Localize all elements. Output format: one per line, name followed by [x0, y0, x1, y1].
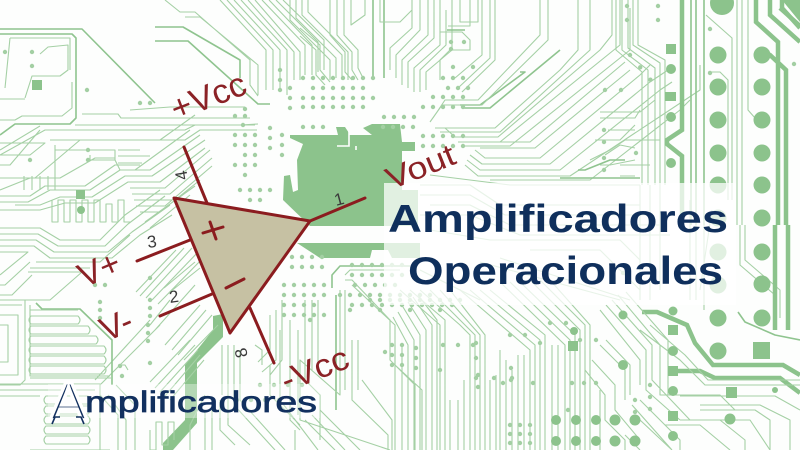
pin number 3: 3 — [146, 232, 158, 252]
title line 2: Operacionales — [408, 250, 723, 293]
logo wordmark: mplificadores — [85, 386, 317, 419]
label: -Vcc: -Vcc — [275, 339, 354, 399]
label: V-: V- — [94, 302, 139, 349]
logo backdrop — [48, 384, 320, 418]
op-amp symbol — [137, 147, 365, 363]
lead: -Vcc pin 8 — [250, 308, 274, 363]
label: Vout: Vout — [381, 137, 461, 196]
traces: behind title — [420, 175, 712, 310]
logo letter A: A — [50, 372, 87, 432]
traces: lower right — [585, 292, 800, 450]
copper pour: lower left strip — [163, 314, 223, 450]
traces: top left — [0, 29, 258, 190]
label: +Vcc: +Vcc — [165, 65, 252, 128]
title line 1: Amplificadores — [388, 198, 728, 241]
plus sign — [203, 222, 223, 239]
pin number 2: 2 — [168, 287, 180, 307]
lead: +Vcc pin 4 — [184, 147, 207, 203]
title — [388, 198, 728, 293]
logo feet — [52, 417, 84, 424]
copper pour: lower band — [297, 243, 420, 258]
traces: lower left comb — [0, 303, 318, 450]
title backdrop — [384, 183, 736, 305]
traces: left middle — [0, 115, 218, 385]
pour slit — [337, 131, 356, 150]
lead: V- pin 2 — [160, 294, 212, 316]
lead: V+ pin 3 — [137, 240, 190, 261]
logo — [50, 372, 317, 432]
minus sign — [226, 279, 244, 288]
pin number 4: 4 — [172, 169, 192, 182]
traces: lower centre — [205, 266, 600, 450]
pin number 1: 1 — [332, 189, 346, 210]
label: V+: V+ — [72, 244, 126, 295]
copper pour: central ground plane — [283, 124, 418, 226]
traces: top centre — [155, 0, 700, 185]
lead: output pin 1 — [310, 198, 365, 221]
traces: right side — [667, 0, 800, 340]
amplifier triangle — [174, 198, 310, 333]
pin number 8: 8 — [231, 346, 252, 360]
